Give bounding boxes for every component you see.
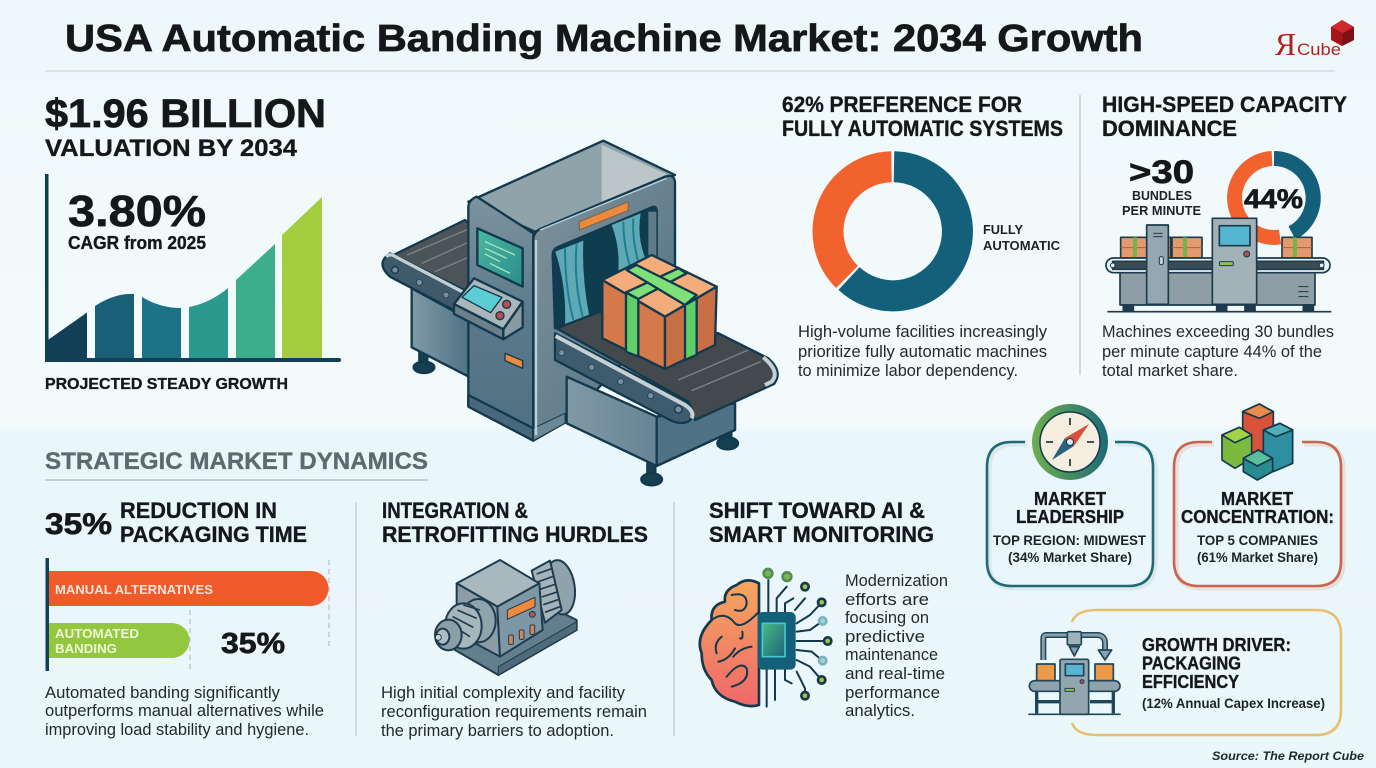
figure: 35% (45, 508, 112, 541)
description: reconfiguration requirements remain (381, 703, 647, 721)
heading (709, 498, 934, 547)
valuation figure: $1.96 BILLION (45, 92, 326, 136)
text (1142, 635, 1325, 711)
bar chart: projected growth (45, 174, 341, 362)
card: market concentration (1174, 404, 1343, 588)
heading: PACKAGING TIME (120, 522, 307, 547)
comparison bars: AUTOMATED (55, 626, 139, 641)
text: LEADERSHIP (1016, 507, 1124, 527)
description: per minute capture 44% of the (1102, 342, 1322, 361)
heading (120, 498, 307, 547)
banded box (602, 255, 717, 369)
CAGR caption: CAGR from 2025 (68, 233, 206, 253)
machine housing (468, 141, 675, 441)
comparison bars (46, 558, 329, 671)
icon: brain and chip (700, 569, 831, 707)
section heading: strategic market dynamics: STRATEGIC MARKET DYNAMICS (45, 448, 428, 475)
description: Machines exceeding 30 bundles (1102, 322, 1334, 341)
icon: compass (1032, 404, 1108, 480)
description (798, 322, 1047, 380)
text (993, 489, 1146, 565)
description: analytics. (845, 702, 915, 720)
heading: HIGH-SPEED CAPACITY (1102, 92, 1347, 117)
tunnel opening with curtains (553, 207, 657, 328)
text: (12% Annual Capex Increase) (1142, 695, 1325, 711)
left conveyor (382, 220, 477, 377)
text: MARKET (1221, 489, 1293, 509)
logo: RCube: Я (1275, 26, 1296, 62)
text: (34% Market Share) (1008, 549, 1132, 565)
donut label: AUTOMATIC (983, 239, 1060, 253)
card: market leadership (987, 404, 1155, 588)
comparison bars: BANDING (55, 641, 117, 656)
card: growth driver (1028, 610, 1341, 735)
ring chart 44%: 44% (1244, 184, 1303, 214)
description: total market share. (1102, 361, 1238, 380)
heading (782, 92, 1063, 141)
description (1102, 322, 1334, 380)
valuation caption: VALUATION BY 2034 (45, 135, 298, 162)
text (1181, 489, 1334, 565)
comparison bars: MANUAL ALTERNATIVES (55, 582, 213, 597)
text: CONCENTRATION: (1181, 507, 1334, 527)
heading: FULLY AUTOMATIC SYSTEMS (782, 116, 1063, 141)
heading: INTEGRATION & (382, 498, 528, 523)
illustration: automatic banding machine (382, 141, 778, 485)
bundles figure: >30 (1129, 154, 1194, 190)
donut label: FULLY (983, 223, 1024, 237)
description: outperforms manual alternatives while (45, 702, 324, 720)
ring chart 44% (1235, 158, 1313, 237)
text: MARKET (1034, 489, 1106, 509)
description: High-volume facilities increasingly (798, 322, 1047, 341)
panel: packaging time reduction (45, 498, 329, 739)
logo: RCube (1275, 20, 1354, 62)
description (381, 684, 647, 740)
description: the primary barriers to adoption. (381, 722, 614, 740)
text: TOP 5 COMPANIES (1197, 532, 1318, 548)
description: to minimize labor dependency. (798, 361, 1018, 380)
logo: RCube: Cube (1297, 40, 1341, 59)
title: USA Automatic Banding Machine Market: 2034 Growth (65, 18, 1143, 60)
description: maintenance (845, 646, 938, 664)
bundles figure: BUNDLES (1132, 189, 1192, 203)
panel: integration hurdles (381, 498, 648, 740)
description: prioritize fully automatic machines (798, 342, 1047, 361)
heading: SMART MONITORING (709, 522, 934, 547)
bundles figure: PER MINUTE (1122, 204, 1201, 218)
chart caption: PROJECTED STEADY GROWTH (45, 376, 288, 393)
control panel (454, 278, 523, 339)
heading: REDUCTION IN (120, 498, 277, 523)
icon: conveyor machines (1106, 218, 1331, 312)
description: efforts are (845, 591, 929, 609)
heading: SHIFT TOWARD AI & (709, 498, 925, 523)
panel: fully automatic preference (782, 92, 1063, 380)
icon: motor (435, 558, 578, 675)
comparison bars: 35% (221, 628, 285, 660)
text: PACKAGING (1142, 654, 1241, 674)
donut label (983, 223, 1060, 253)
text: GROWTH DRIVER: (1142, 635, 1291, 655)
icon: 3D bars (1222, 404, 1293, 480)
description: focusing on (845, 609, 929, 627)
donut chart (828, 167, 957, 296)
text: TOP REGION: MIDWEST (993, 532, 1146, 548)
heading (382, 498, 648, 547)
bundles figure (1122, 154, 1201, 218)
heading: 62% PREFERENCE FOR (782, 92, 1022, 117)
panel: AI and smart monitoring (700, 498, 948, 720)
text: EFFICIENCY (1142, 672, 1239, 692)
description (845, 572, 948, 720)
icon: packaging line (1028, 632, 1121, 714)
heading: RETROFITTING HURDLES (382, 522, 648, 547)
text: (61% Market Share) (1197, 549, 1318, 565)
description: predictive (845, 628, 925, 646)
description: Modernization (845, 572, 948, 590)
heading (1102, 92, 1347, 141)
source note: Source: The Report Cube (1212, 749, 1364, 763)
description: Automated banding significantly (45, 684, 281, 702)
description: High initial complexity and facility (381, 684, 626, 702)
description (45, 684, 324, 739)
panel: high-speed capacity (1102, 92, 1347, 380)
right conveyor (555, 312, 778, 485)
heading: DOMINANCE (1102, 116, 1237, 141)
panel: valuation and growth chart (45, 92, 341, 393)
description: improving load stability and hygiene. (45, 721, 309, 739)
CAGR figure: 3.80% (68, 187, 206, 236)
description: and real-time (845, 665, 945, 683)
description: performance (845, 684, 940, 702)
